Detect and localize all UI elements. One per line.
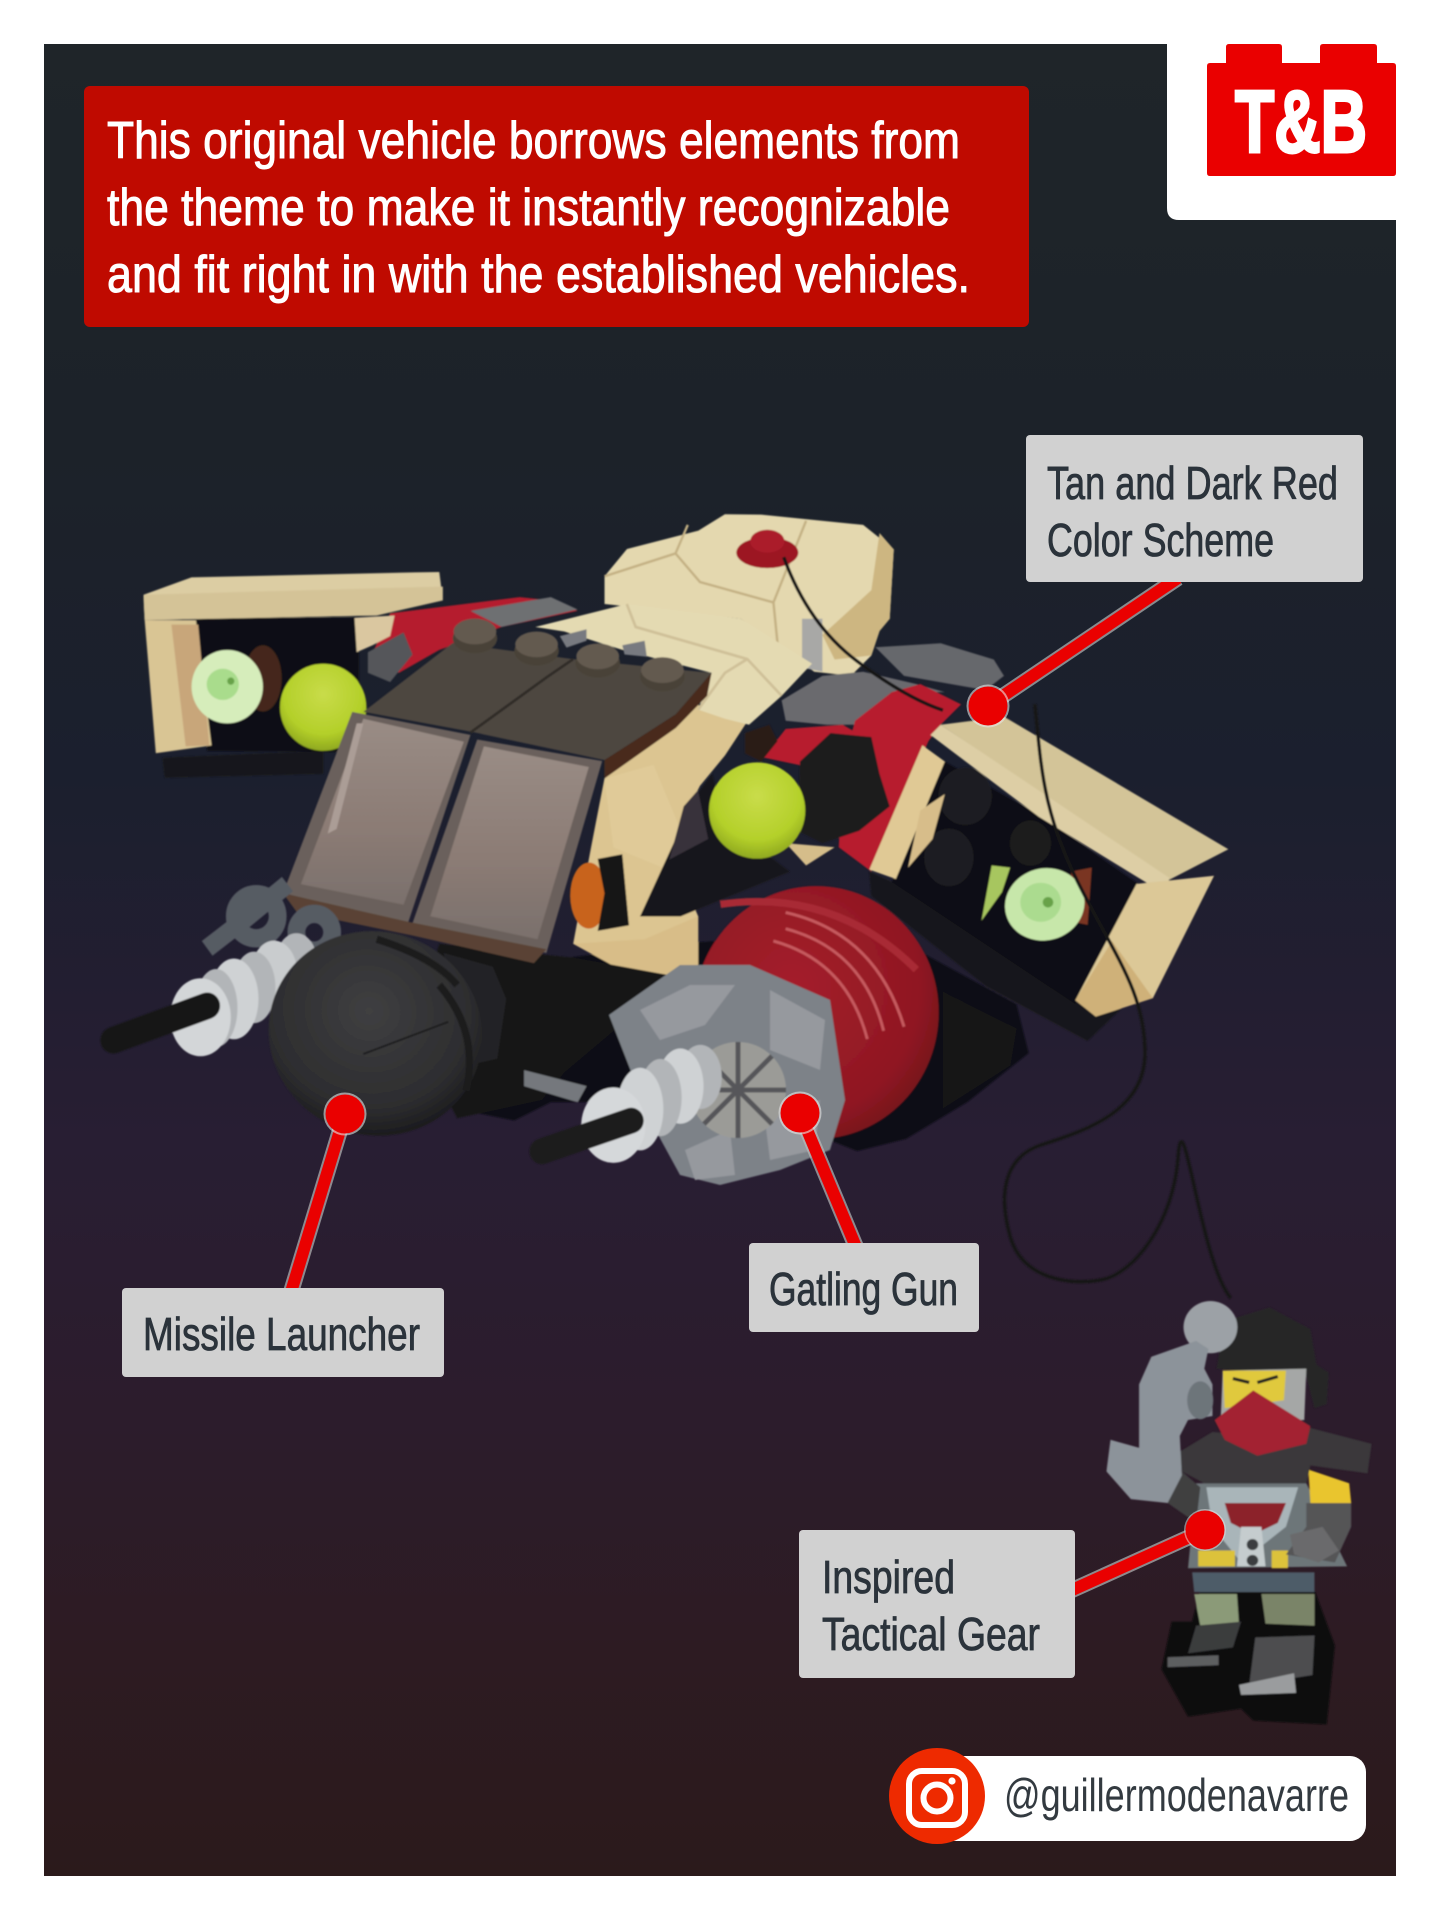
icon: instagram <box>889 1748 985 1844</box>
callout: gatling gun <box>749 1092 979 1332</box>
black cord <box>784 557 1231 1298</box>
heading banner: This original vehicle borrows elements from <box>107 112 960 170</box>
heading banner <box>84 86 1029 327</box>
gatling spring and black pin <box>542 1045 722 1163</box>
instagram handle badge <box>889 1748 1366 1844</box>
label box <box>749 1243 979 1332</box>
label box <box>1026 435 1363 582</box>
tinted cockpit canopy <box>283 619 712 963</box>
leader line and dot <box>778 1092 856 1247</box>
logo: T&B brick: T&B <box>1235 72 1367 171</box>
label box: Inspired <box>822 1551 955 1603</box>
missile launcher black sphere <box>250 911 501 1156</box>
grey technic frame behind left spring <box>207 884 332 951</box>
leader line and dot <box>1070 1509 1226 1591</box>
leader line and dot <box>291 1092 366 1292</box>
minifigure with tactical gear <box>1106 1301 1372 1724</box>
black rocket hull behind missile <box>412 944 698 1118</box>
label box: Tactical Gear <box>822 1608 1040 1660</box>
black fin, gun and lime sphere <box>640 733 890 917</box>
leader line and dot <box>966 578 1178 728</box>
label box: Color Scheme <box>1047 514 1274 566</box>
label box <box>122 1288 444 1377</box>
label box: Gatling Gun <box>769 1263 958 1315</box>
left spring and black pin <box>113 933 317 1056</box>
left tan pod <box>143 572 578 778</box>
callout: inspired tactical gear <box>799 1509 1226 1678</box>
heading banner: the theme to make it instantly recognizable <box>107 179 950 237</box>
red gatling drum <box>694 886 939 1139</box>
black undercarriage <box>453 931 1029 1151</box>
label box <box>799 1530 1075 1678</box>
logo: T&B brick <box>1167 44 1440 220</box>
label box: Missile Launcher <box>143 1308 420 1360</box>
vehicle photo illustration <box>113 514 1372 1724</box>
right tan pod <box>869 717 1228 1041</box>
main tan body <box>535 604 812 983</box>
callout: missile launcher <box>122 1092 444 1377</box>
callout: tan and dark red colour scheme <box>966 435 1363 728</box>
instagram handle badge: @guillermodenavarre <box>1004 1769 1349 1821</box>
label box: Tan and Dark Red <box>1047 457 1338 509</box>
gatling gun hub <box>609 965 845 1185</box>
heading banner: and fit right in with the established vehicles. <box>107 246 970 304</box>
rear hull and red wing joint <box>605 514 1004 872</box>
